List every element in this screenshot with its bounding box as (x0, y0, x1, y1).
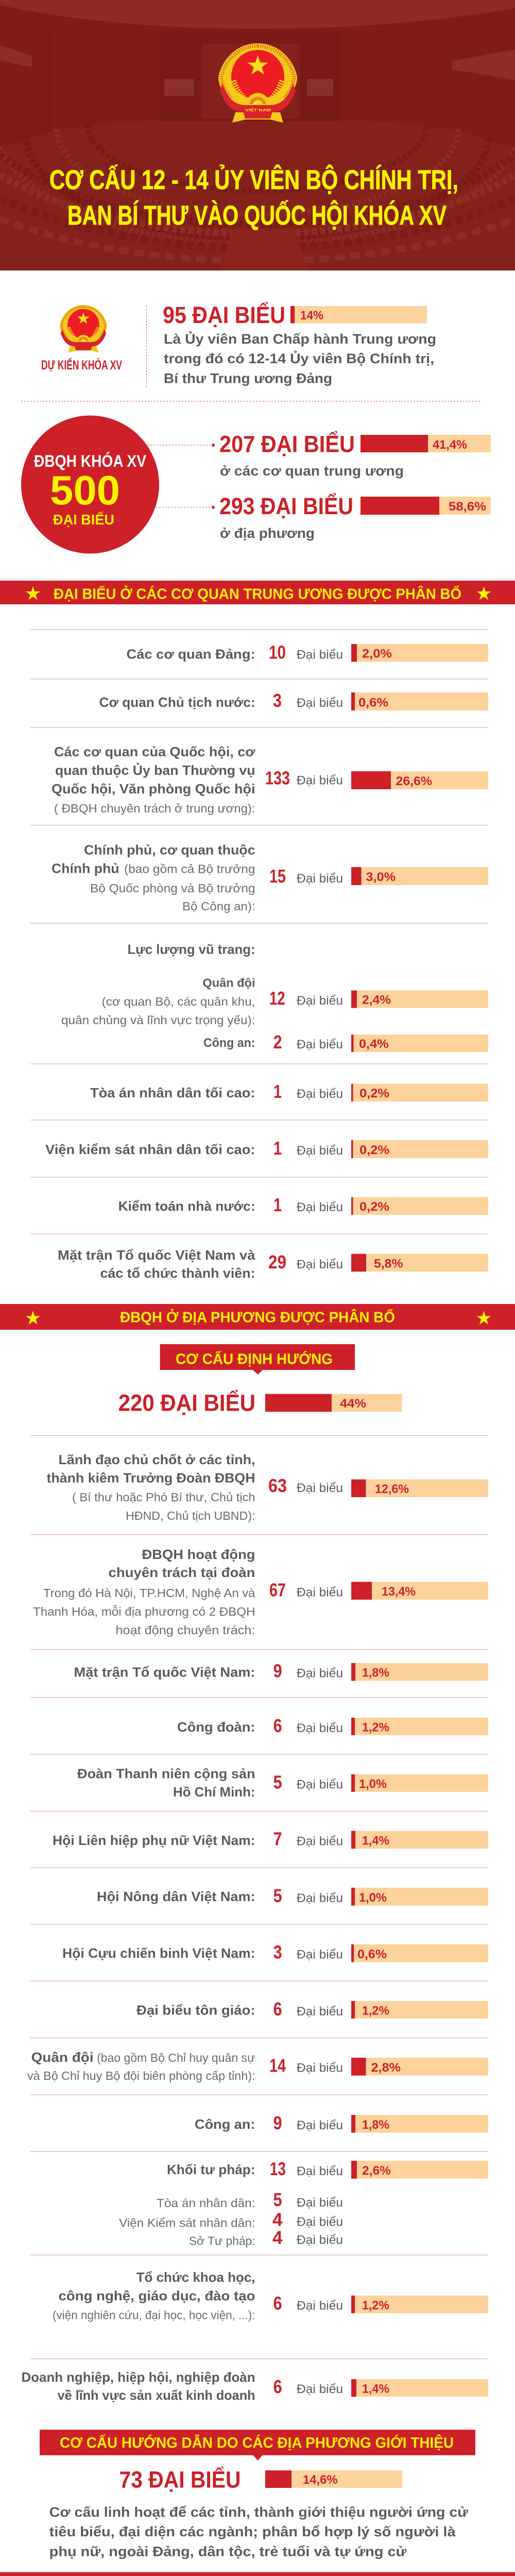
stat: 207 central delegates (219, 431, 491, 479)
label (52, 744, 255, 815)
sub-row: police: 0,4% (359, 1037, 388, 1051)
bar 12,6%: 12,6% (375, 1482, 409, 1496)
count: Đại biểu (297, 1586, 343, 1600)
row: full-time delegates (33, 1547, 488, 1637)
sub-row: justice department: Đại biểu (297, 2233, 343, 2247)
count (269, 1580, 343, 1601)
panel: local allocation (22, 1435, 488, 2403)
bar 0,6%: 0,6% (358, 696, 388, 709)
stat: 220 delegates: 44% (340, 1397, 366, 1411)
label: Công an: (195, 2116, 255, 2132)
label: Chính phủ, cơ quan thuộc (84, 842, 255, 857)
sub-row: justice department: 4 (272, 2227, 282, 2248)
bar: 14%: 14% (300, 309, 323, 323)
count: Đại biểu (297, 2299, 343, 2313)
banner: central agencies (0, 581, 515, 604)
label: HĐND, Chủ tịch UBND): (126, 1509, 255, 1522)
label: Chính phủ (52, 860, 119, 876)
bar 3,0% (351, 867, 488, 885)
count: 7 (273, 1828, 282, 1850)
circle: total delegates: ĐBQH KHÓA XV (34, 452, 147, 470)
count: 6 (273, 1998, 282, 2020)
label: Hội Cựu chiến binh Việt Nam: (62, 1945, 255, 1961)
bar 1,0% (351, 1774, 488, 1792)
bar 1,2% (351, 1718, 488, 1735)
count: Đại biểu (297, 1777, 343, 1791)
label: Tòa án nhân dân tối cao: (90, 1085, 255, 1100)
count (268, 1475, 343, 1496)
bar 0,2% (351, 1140, 488, 1158)
sub-heading: orientation structure (160, 1344, 355, 1375)
label: ĐBQH hoạt động (142, 1547, 255, 1562)
panel: 95 delegates (41, 302, 436, 388)
label: Bộ Quốc phòng và Bộ trưởng (90, 882, 255, 895)
label (46, 1452, 255, 1522)
count (273, 1660, 343, 1682)
icon: national emblem: VIỆT NAM (245, 108, 271, 112)
count: Đại biểu (297, 1481, 343, 1495)
count (273, 690, 343, 711)
label: Đoàn Thanh niên cộng sản (77, 1766, 255, 1782)
bar 12,6% (351, 1480, 488, 1497)
sub-row: army: 2,4% (362, 993, 391, 1007)
bar 1,4%: 1,4% (362, 2382, 389, 2396)
label: Đại biểu tôn giáo: (136, 2003, 255, 2018)
label: (bao gồm cả Bộ trưởng (124, 862, 255, 875)
bar 0,6% (351, 692, 488, 710)
bar 2,0% (351, 644, 488, 662)
count (268, 1251, 343, 1273)
bar 2,8% (351, 2058, 488, 2076)
sub-heading: orientation structure: CƠ CẤU ĐỊNH HƯỚNG (176, 1350, 333, 1368)
count (273, 2376, 343, 2397)
count: 5 (273, 1771, 282, 1792)
stat: 220 delegates (118, 1390, 402, 1416)
row: supreme procuracy (45, 1138, 488, 1159)
banner: local delegates (0, 1304, 515, 1330)
count (270, 2158, 343, 2179)
bar 1,0%: 1,0% (359, 1891, 387, 1905)
count (273, 1194, 343, 1215)
count: Đại biểu (297, 1721, 343, 1735)
label: Doanh nghiệp, hiệp hội, nghiệp đoàn (22, 2369, 255, 2385)
bar 2,8%: 2,8% (371, 2061, 401, 2075)
sub-heading: guided structure (40, 2430, 475, 2461)
count (273, 1138, 343, 1159)
count: Đại biểu (297, 2382, 343, 2396)
label (33, 1547, 255, 1637)
sub-row: people's court: Đại biểu (297, 2196, 343, 2210)
sub-row: police: 2 (273, 1031, 282, 1053)
row: enterprises (22, 2369, 488, 2403)
stat: 220 delegates: 220 ĐẠI BIỂU (118, 1390, 255, 1416)
title (49, 164, 458, 231)
bar 13,4% (351, 1582, 488, 1600)
hero background: national assembly hall tinted red (0, 0, 515, 270)
stat: 293 local delegates (219, 493, 491, 541)
row: fatherland front (58, 1247, 488, 1281)
label: ( ĐBQH chuyên trách ở trung ương): (54, 802, 255, 815)
panel: hero header (0, 0, 515, 270)
bar 2,6% (351, 2161, 488, 2179)
row: president office (99, 690, 488, 711)
stat: 73 delegates: 73 ĐẠI BIỂU (119, 2467, 241, 2493)
bar 1,8% (351, 1663, 488, 1681)
circle: total delegates: 500 (50, 467, 120, 513)
count: Đại biểu (297, 774, 343, 788)
count: Đại biểu (297, 648, 343, 662)
label: hoạt động chuyên trách: (115, 1623, 255, 1637)
count: Đại biểu (297, 1667, 343, 1681)
bar 1,2%: 1,2% (362, 2004, 389, 2018)
connector: central (147, 444, 215, 447)
count: 3 (273, 1942, 282, 1963)
count: 5 (273, 1885, 282, 1906)
bar 5,8% (351, 1254, 488, 1272)
label: Lãnh đạo chủ chốt ở các tỉnh, (59, 1452, 255, 1467)
banner: central agencies: ĐẠI BIỂU Ở CÁC CƠ QUAN TRUNG ƯƠNG ĐƯỢC PHÂN BỔ (54, 585, 461, 603)
bar 0,6% (351, 1944, 488, 1962)
bar 1,4%: 1,4% (362, 1834, 389, 1848)
sub-row: police (203, 1031, 488, 1053)
count: Đại biểu (297, 2119, 343, 2132)
sub-row: people's court: Tòa án nhân dân: (157, 2196, 255, 2210)
count: Đại biểu (297, 1087, 343, 1101)
text block: description (164, 330, 436, 386)
banner: local delegates: ĐBQH Ở ĐỊA PHƯƠNG ĐƯỢC PHÂN BỔ (120, 1309, 395, 1326)
row: science and education (53, 2269, 488, 2321)
label: Kiểm toán nhà nước: (118, 1198, 255, 1214)
label: Viện kiểm sát nhân dân tối cao: (45, 1142, 255, 1157)
bar 0,2% (351, 1197, 488, 1215)
row: women's union (53, 1828, 488, 1850)
label: Trong đó Hà Nội, TP.HCM, Nghệ An và (43, 1586, 255, 1600)
sub-row: police: Công an: (203, 1036, 255, 1050)
count: Đại biểu (297, 696, 343, 710)
count (269, 642, 343, 663)
count (273, 2293, 343, 2314)
sub-row: people's procuracy: Đại biểu (297, 2215, 343, 2229)
text block: flexible structure: tiêu biểu, đại diện các ngành; phân bổ hợp lý số người là (49, 2524, 456, 2539)
row: trade union (177, 1715, 488, 1736)
count: 14 (269, 2055, 286, 2076)
circle: total delegates (21, 415, 159, 553)
label (27, 2049, 255, 2082)
count (273, 1942, 343, 1963)
sub-row: justice department (189, 2227, 343, 2248)
text block: description: Là Ủy viên Ban Chấp hành Trung ương (164, 330, 436, 347)
label: ( Bí thư hoặc Phó Bí thư, Chủ tịch (72, 1490, 255, 1504)
label: (bao gồm Bộ Chỉ huy quân sự (97, 2051, 255, 2064)
label: Mặt trận Tổ quốc Việt Nam và (58, 1247, 255, 1263)
bar 0,2%: 0,2% (359, 1143, 389, 1157)
sub-row: people's procuracy (119, 2209, 343, 2230)
count: Đại biểu (297, 1948, 343, 1962)
count: 29 (268, 1251, 286, 1273)
row: key provincial leaders (46, 1452, 488, 1522)
stat: 207 central delegates: ở các cơ quan trung ương (220, 463, 404, 479)
bar 26,6% (351, 771, 488, 789)
label: Khối tư pháp: (167, 2162, 255, 2177)
count: 6 (273, 2376, 282, 2397)
count: Đại biểu (297, 2164, 343, 2178)
bar 1,0% (351, 1888, 488, 1906)
text block: flexible structure: phụ nữ, ngoài Đảng, dân tộc, trẻ tuổi và tự ứng cử (49, 2544, 407, 2560)
label: Thanh Hóa, mỗi địa phương có 2 ĐBQH (33, 1605, 255, 1618)
count: 67 (269, 1580, 286, 1601)
bar 0,2%: 0,2% (359, 1200, 389, 1214)
bar 0,6%: 0,6% (357, 1947, 387, 1961)
icon: small emblem with caption: DỰ KIẾN KHÓA XV (41, 357, 122, 372)
label: Hồ Chí Minh: (173, 1784, 255, 1800)
count: 15 (269, 866, 286, 887)
stat: 293 local delegates: ở địa phương (220, 526, 315, 541)
label: và Bộ Chỉ huy Bộ đội biên phòng cấp tỉnh): (27, 2069, 255, 2082)
label: Các cơ quan Đảng: (127, 646, 255, 662)
count: 1 (273, 1138, 282, 1159)
count (273, 1081, 343, 1102)
row: party agencies (127, 642, 488, 663)
text block: description: Bí thư Trung ương Đảng (164, 371, 332, 386)
icon: small emblem with caption (41, 305, 122, 372)
bar 1,8%: 1,8% (362, 1666, 389, 1680)
row: religious delegates (136, 1998, 488, 2020)
label: Tổ chức khoa học, (136, 2269, 255, 2285)
count (265, 768, 343, 789)
row: government (52, 842, 488, 913)
row: supreme court (90, 1081, 488, 1102)
count (269, 2055, 343, 2076)
banner: combined structure (0, 2572, 515, 2576)
sub-row: army: (cơ quan Bộ, các quân khu, (102, 995, 255, 1008)
label: Mặt trận Tổ quốc Việt Nam: (74, 1664, 255, 1680)
count: 9 (273, 1660, 282, 1682)
count (273, 1998, 343, 2020)
bar 2,6%: 2,6% (362, 2164, 391, 2178)
label (58, 1247, 255, 1281)
bar 1,2%: 1,2% (362, 2298, 389, 2312)
bar 0,2%: 0,2% (359, 1087, 389, 1100)
count: Đại biểu (297, 2005, 343, 2019)
sub-row: people's procuracy: Viện Kiểm sát nhân dân: (119, 2216, 255, 2230)
label: Cơ quan Chủ tịch nước: (99, 694, 255, 710)
row: state audit (118, 1194, 488, 1215)
count (273, 1771, 343, 1792)
bar 0,2% (351, 1084, 488, 1101)
count: Đại biểu (297, 1200, 343, 1214)
bar 1,2% (351, 2296, 488, 2313)
bar 1,4% (351, 1831, 488, 1849)
label: Công đoàn: (177, 1719, 255, 1735)
icon: national emblem (218, 43, 297, 123)
stat: 207 central delegates: 41,4% (433, 438, 467, 452)
bar 1,4% (351, 2379, 488, 2397)
count (273, 1715, 343, 1736)
count: Đại biểu (297, 2061, 343, 2075)
label: quan thuộc Ủy ban Thường vụ (55, 762, 255, 778)
heading: 95 delegates: 95 ĐẠI BIỂU (163, 302, 285, 328)
sub-heading: guided structure: CƠ CẤU HƯỚNG DẪN DO CÁC ĐỊA PHƯƠNG GIỚI THIỆU (60, 2434, 454, 2451)
sub-row: army (61, 976, 488, 1027)
sub-row: people's procuracy: 4 (272, 2209, 282, 2230)
row: military (local) (27, 2049, 488, 2082)
row: youth union (77, 1766, 488, 1800)
label: Hội Nông dân Việt Nam: (97, 1889, 255, 1904)
stat: 73 delegates: 14,6% (303, 2473, 338, 2487)
bar 1,2% (351, 2001, 488, 2019)
bar 13,4%: 13,4% (382, 1585, 416, 1599)
panel: central agency allocation (30, 630, 488, 1281)
text block: flexible structure: Cơ cấu linh hoạt để các tỉnh, thành giới thiệu người ứng cử (49, 2504, 468, 2520)
label (22, 2369, 255, 2403)
count: 63 (268, 1475, 287, 1496)
label: Quốc hội, Văn phòng Quốc hội (52, 781, 255, 796)
connector: local (156, 506, 215, 509)
sub-row: people's court: 5 (273, 2189, 282, 2210)
bar 1,8% (351, 2115, 488, 2133)
row: national assembly agencies (52, 744, 488, 815)
bar 3,0%: 3,0% (366, 870, 396, 884)
row: police (local) (195, 2112, 488, 2133)
label: Quân đội (31, 2049, 94, 2065)
bar 1,0%: 1,0% (359, 1777, 387, 1791)
bar 1,2%: 1,2% (362, 1721, 389, 1734)
label: (viện nghiên cứu, đại học, học viện, ...): (53, 2308, 255, 2321)
label: Lực lượng vũ trang: (128, 942, 255, 957)
count: Đại biểu (297, 1835, 343, 1849)
count: Đại biểu (297, 1144, 343, 1158)
label: chuyên trách tại đoàn (108, 1565, 255, 1580)
row: judicial bloc (119, 2158, 488, 2248)
sub-row: justice department: Sở Tư pháp: (189, 2234, 255, 2248)
count: 13 (270, 2158, 286, 2179)
bar 1,8%: 1,8% (362, 2118, 389, 2132)
sub-row: army: 12 (269, 988, 285, 1009)
bar 26,6%: 26,6% (396, 774, 432, 788)
label (77, 1766, 255, 1800)
label: công nghệ, giáo dục, đào tạo (59, 2288, 255, 2303)
sub-row: people's court (157, 2189, 343, 2210)
label: Các cơ quan của Quốc hội, cơ (54, 744, 255, 759)
row: armed forces (61, 942, 488, 1053)
row: fatherland front (local) (74, 1660, 488, 1682)
label: về lĩnh vực sản xuất kinh doanh (58, 2387, 255, 2403)
stat: 207 central delegates: 207 ĐẠI BIỂU (219, 431, 355, 457)
count: 10 (269, 642, 286, 663)
sub-row: army: Quân đội (203, 976, 255, 990)
count (273, 1885, 343, 1906)
sub-row: police: Đại biểu (297, 1038, 343, 1052)
label (52, 842, 255, 913)
stat: 293 local delegates: 58,6% (449, 500, 486, 514)
sub-row: army: quân chủng và lĩnh vực trọng yếu): (61, 1013, 255, 1027)
count: 3 (273, 690, 282, 711)
count: 6 (273, 2293, 282, 2314)
count (269, 866, 343, 887)
bar 2,0%: 2,0% (362, 647, 392, 660)
count: 6 (273, 1715, 282, 1736)
label: Bộ Công an): (182, 900, 255, 913)
count (273, 2112, 343, 2133)
label: các tổ chức thành viên: (100, 1265, 255, 1281)
count (273, 1828, 343, 1850)
sub-row: army: Đại biểu (297, 994, 343, 1008)
count: Đại biểu (297, 1258, 343, 1272)
count: 9 (273, 2112, 282, 2133)
row: veterans' association (62, 1942, 488, 1963)
count: Đại biểu (297, 1891, 343, 1905)
stat: 73 delegates (119, 2467, 402, 2493)
circle: total delegates: ĐẠI BIỂU (53, 512, 114, 528)
row: farmers' union (97, 1885, 488, 1906)
count: 1 (273, 1194, 282, 1215)
stat: 293 local delegates: 293 ĐẠI BIỂU (219, 493, 353, 519)
bar: 14% (290, 306, 427, 324)
bar 5,8%: 5,8% (374, 1257, 403, 1270)
label: thành kiêm Trưởng Đoàn ĐBQH (46, 1470, 255, 1486)
count: 133 (265, 768, 290, 789)
label (53, 2269, 255, 2321)
text block: flexible structure (49, 2504, 468, 2560)
panel: 500 delegates summary (21, 415, 491, 553)
text block: description: trong đó có 12-14 Ủy viên Bộ Chính trị, (164, 350, 434, 366)
count: Đại biểu (297, 872, 343, 886)
label: Hội Liên hiệp phụ nữ Việt Nam: (53, 1833, 255, 1848)
count: 1 (273, 1081, 282, 1102)
